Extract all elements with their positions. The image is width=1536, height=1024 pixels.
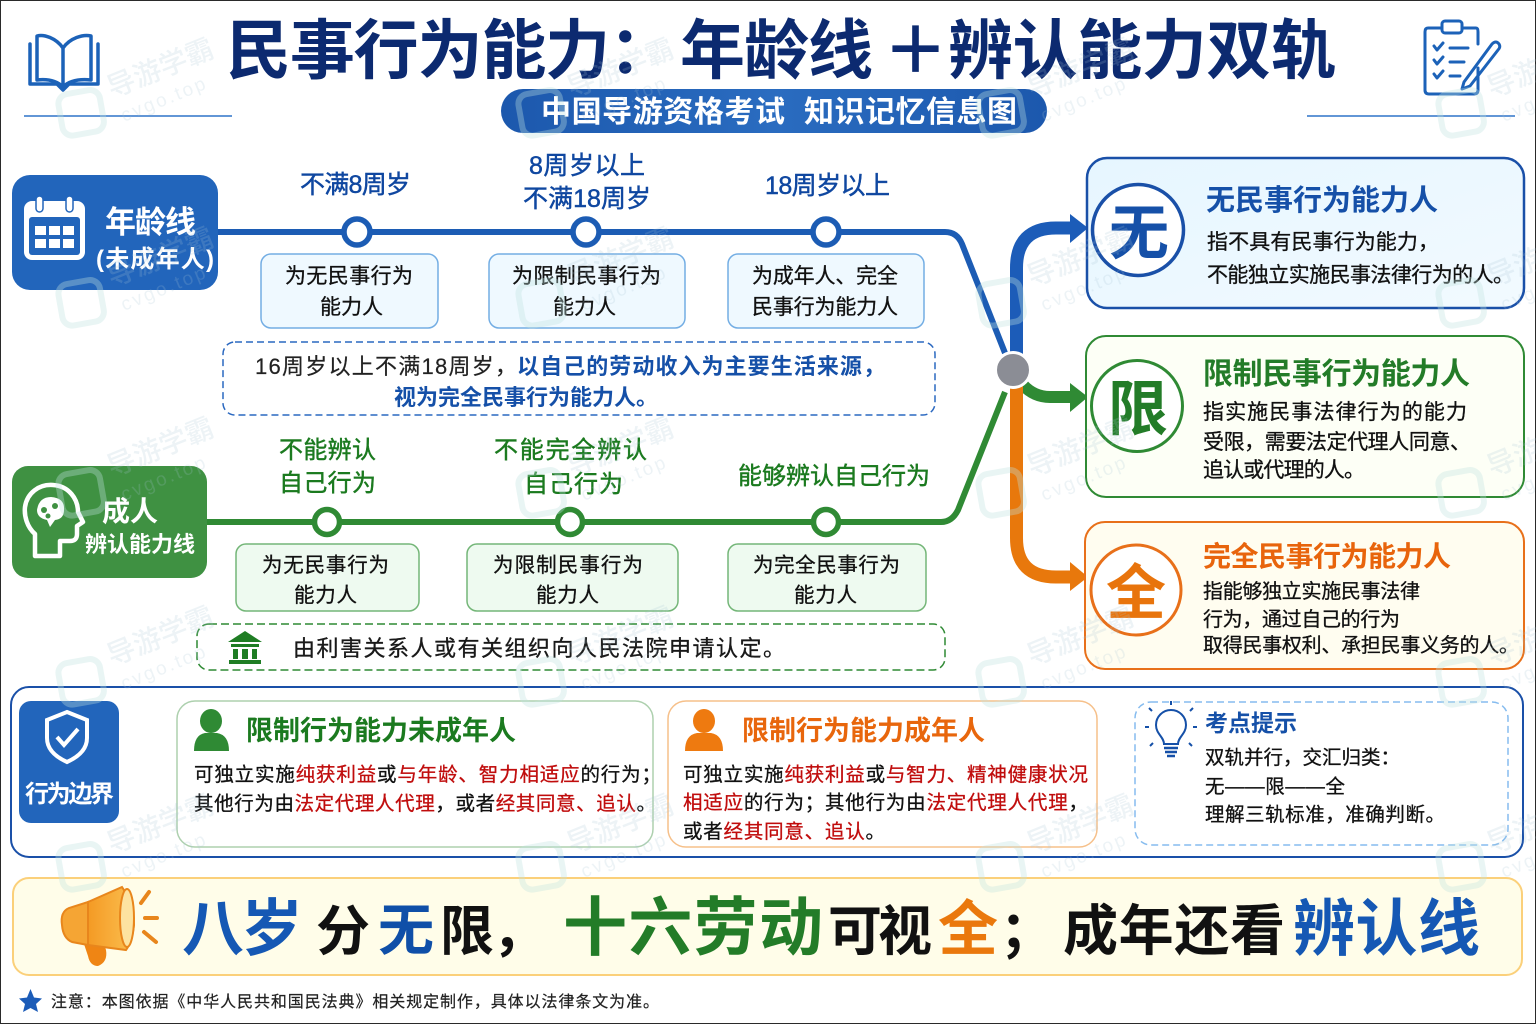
card: 8 to 18 bbox=[489, 254, 685, 328]
text: cvgo.top bbox=[118, 829, 211, 883]
text: 导游学霸 bbox=[103, 33, 218, 104]
text: slogan: 无 bbox=[378, 899, 434, 962]
text: slogan: 成年还看 bbox=[1063, 900, 1285, 962]
text: cvgo.top bbox=[578, 73, 671, 127]
card: limited adult: 或者经其同意、追认。 bbox=[683, 821, 885, 843]
arrow: to limited bbox=[1023, 385, 1072, 397]
text: slogan: ； bbox=[1000, 902, 1054, 962]
box: age line heading bbox=[12, 175, 218, 290]
icon: light bulb bbox=[1145, 701, 1197, 756]
card: partly recognise: 能力人 bbox=[536, 584, 599, 607]
title: 年龄线 bbox=[680, 14, 873, 87]
box: age line heading: (未成年人) bbox=[96, 246, 214, 273]
arrow: to none bbox=[1016, 228, 1072, 356]
text: cvgo.top bbox=[578, 641, 671, 695]
node labels: 不满8周岁 bbox=[300, 171, 411, 199]
card: 8 to 18: 为限制民事行为 bbox=[512, 265, 661, 288]
arrows: hub to categories bbox=[996, 214, 1088, 591]
card: can recognise: 为完全民事行为 bbox=[753, 554, 900, 577]
text: 导游学霸 bbox=[1023, 412, 1138, 483]
text: slogan: ， bbox=[492, 902, 546, 962]
panel: mnemonic slogan bbox=[13, 878, 1522, 975]
box: boundary label: 行为边界 bbox=[25, 781, 114, 808]
panel: cognition line bbox=[12, 392, 1005, 670]
note: court determination: 由利害关系人或有关组织向人民法院申请认定。 bbox=[293, 636, 785, 661]
panel: no capacity: 不能独立实施民事法律行为的人。 bbox=[1207, 264, 1514, 287]
note: age 16 rule: 16周岁以上不满18周岁， bbox=[255, 354, 517, 379]
card: exam tip: 理解三轨标准，准确判断。 bbox=[1205, 804, 1445, 826]
node labels: 自己行为 bbox=[524, 471, 623, 498]
text: slogan: 八岁 bbox=[182, 895, 303, 964]
text: 导游学霸 bbox=[103, 601, 218, 672]
text: 导游学霸 bbox=[1023, 601, 1138, 672]
panel: limited capacity: 追认或代理的人。 bbox=[1203, 459, 1365, 482]
text: 导游学霸 bbox=[1023, 33, 1138, 104]
node labels: 不能完全辨认 bbox=[494, 437, 647, 464]
card: cannot recognise: 为无民事行为 bbox=[262, 554, 389, 577]
icon: calendar bbox=[24, 196, 85, 260]
icon: checklist clipboard bbox=[1425, 21, 1500, 94]
icon: 限 badge: 限 bbox=[1108, 376, 1168, 443]
note: age 16 rule: 以自己的劳动收入为主要生活来源， bbox=[517, 354, 885, 379]
line: green track bbox=[207, 392, 1005, 522]
card: 18 and over bbox=[728, 254, 924, 328]
text: cvgo.top bbox=[1038, 829, 1131, 883]
text: cvgo.top bbox=[578, 262, 671, 316]
card: limited minor: 可独立实施纯获利益或与年龄、智力相适应的行为； bbox=[194, 764, 661, 786]
text: 导游学霸 bbox=[563, 33, 678, 104]
panel: full capacity bbox=[1085, 522, 1524, 669]
panel: full capacity: 行为，通过自己的行为 bbox=[1203, 608, 1400, 631]
card: limited adult: 可独立实施纯获利益或与智力、精神健康状况 bbox=[683, 764, 1088, 786]
node labels: 8周岁以上 bbox=[529, 152, 645, 180]
panel: no capacity: 指不具有民事行为能力， bbox=[1207, 231, 1439, 254]
panel: age line bbox=[12, 152, 1005, 415]
node labels: 18周岁以上 bbox=[765, 172, 890, 200]
text: cvgo.top bbox=[118, 452, 211, 506]
card: can recognise bbox=[728, 544, 926, 611]
line: blue track bbox=[218, 232, 1005, 353]
card: partly recognise: 为限制民事行为 bbox=[493, 554, 643, 577]
panel: limited capacity bbox=[1086, 336, 1524, 497]
card: limited minor bbox=[177, 701, 661, 847]
node labels bbox=[300, 152, 890, 213]
icon: star bbox=[19, 989, 42, 1012]
nodes bbox=[314, 510, 838, 534]
panel: full capacity: 取得民事权利、承担民事义务的人。 bbox=[1203, 634, 1519, 657]
icon: shield bbox=[47, 712, 87, 762]
footnote: 注意：本图依据《中华人民共和国民法典》相关规定制作，具体以法律条文为准。 bbox=[51, 992, 659, 1011]
panel: limited capacity: 受限，需要法定代理人同意、 bbox=[1203, 431, 1471, 454]
note: court determination bbox=[197, 624, 945, 670]
text: cvgo.top bbox=[118, 73, 211, 127]
icon: head with brain bbox=[25, 485, 83, 556]
header bbox=[24, 14, 1515, 133]
subtitle pill: 知识记忆信息图 bbox=[804, 96, 1017, 129]
icon: green person bbox=[194, 709, 229, 751]
text: slogan: 十六劳动 bbox=[563, 892, 823, 964]
title: ＋ bbox=[883, 14, 948, 87]
icon: megaphone bbox=[62, 887, 157, 966]
text: cvgo.top bbox=[578, 452, 671, 506]
icon: 无 badge: 无 bbox=[1109, 200, 1169, 267]
icon: 限 badge bbox=[1092, 360, 1182, 452]
box: age line heading: 年龄线 bbox=[105, 205, 196, 240]
title: 辨认能力双轨 bbox=[948, 14, 1336, 87]
text: 导游学霸 bbox=[103, 789, 218, 860]
panel: limited capacity: 指实施民事法律行为的能力 bbox=[1203, 401, 1467, 424]
text: cvgo.top bbox=[578, 829, 671, 883]
text: slogan: 全 bbox=[938, 896, 998, 963]
card: exam tip: 双轨并行，交汇归类： bbox=[1205, 747, 1400, 769]
card: under 8: 为无民事行为 bbox=[285, 265, 413, 288]
subtitle pill bbox=[501, 89, 1047, 133]
text: 导游学霸 bbox=[563, 601, 678, 672]
text: slogan: 分 bbox=[316, 902, 370, 962]
panel: no capacity: 无民事行为能力人 bbox=[1206, 184, 1438, 217]
panel: full capacity: 完全民事行为能力人 bbox=[1203, 541, 1451, 572]
text: cvgo.top bbox=[1038, 452, 1131, 506]
node labels: 不满18周岁 bbox=[523, 185, 651, 213]
text: 导游学霸 bbox=[1023, 222, 1138, 293]
text: 导游学霸 bbox=[563, 222, 678, 293]
icon: 无 badge bbox=[1092, 184, 1184, 276]
node labels bbox=[279, 437, 930, 498]
card: 18 and over: 为成年人、完全 bbox=[752, 265, 898, 288]
nodes bbox=[344, 219, 839, 245]
text: slogan: 辨认线 bbox=[1293, 895, 1480, 964]
note: age 16 rule: 视为完全民事行为能力人。 bbox=[394, 385, 658, 410]
card: under 8 bbox=[261, 254, 438, 328]
box: adult heading: 辨认能力线 bbox=[85, 532, 195, 557]
card: exam tip: 无——限——全 bbox=[1205, 776, 1345, 798]
title bbox=[226, 14, 1336, 87]
text: 导游学霸 bbox=[1023, 789, 1138, 860]
node labels: 不能辨认 bbox=[279, 437, 376, 464]
text: cvgo.top bbox=[118, 641, 211, 695]
text: slogan bbox=[182, 892, 1480, 964]
card: 18 and over: 民事行为能力人 bbox=[752, 296, 898, 319]
node labels: 能够辨认自己行为 bbox=[738, 463, 930, 490]
card: limited minor: 限制行为能力未成年人 bbox=[246, 716, 516, 746]
card: limited adult: 相适应的行为；其他行为由法定代理人代理， bbox=[683, 792, 1088, 814]
text: cvgo.top bbox=[1038, 73, 1131, 127]
text: slogan: 可视 bbox=[828, 902, 932, 962]
card: limited adult bbox=[668, 701, 1097, 847]
text: 导游学霸 bbox=[563, 789, 678, 860]
card: limited adult: 限制行为能力成年人 bbox=[742, 716, 985, 746]
card: 8 to 18: 能力人 bbox=[553, 296, 616, 319]
node labels: 自己行为 bbox=[279, 470, 376, 497]
card: limited minor: 其他行为由法定代理人代理，或者经其同意、追认。 bbox=[194, 793, 656, 815]
text: slogan: 限 bbox=[440, 902, 494, 962]
panel: no capacity bbox=[1087, 158, 1524, 308]
icon: 全 badge: 全 bbox=[1106, 560, 1166, 627]
subtitle pill: 中国导游资格考试 bbox=[541, 96, 785, 129]
panel: full capacity: 指能够独立实施民事法律 bbox=[1203, 580, 1420, 603]
box: boundary label bbox=[19, 701, 119, 823]
icon: open book bbox=[30, 36, 98, 90]
hub bbox=[996, 352, 1030, 388]
arrow: to full bbox=[1016, 386, 1072, 577]
icon: courthouse bbox=[228, 631, 262, 664]
panel: limited capacity: 限制民事行为能力人 bbox=[1203, 358, 1470, 391]
box: adult heading bbox=[12, 466, 207, 578]
text: cvgo.top bbox=[118, 262, 211, 316]
note: age 16 rule bbox=[223, 342, 935, 415]
icon: orange person bbox=[685, 709, 723, 751]
card: can recognise: 能力人 bbox=[794, 584, 857, 607]
text: cvgo.top bbox=[1038, 641, 1131, 695]
text: 导游学霸 bbox=[103, 222, 218, 293]
card: cannot recognise bbox=[236, 544, 419, 611]
box: adult heading: 成人 bbox=[102, 496, 158, 527]
card: cannot recognise: 能力人 bbox=[294, 584, 357, 607]
text: cvgo.top bbox=[1038, 262, 1131, 316]
card: under 8: 能力人 bbox=[320, 296, 383, 319]
card: exam tip bbox=[1135, 701, 1508, 845]
card: exam tip: 考点提示 bbox=[1205, 710, 1297, 736]
icon: 全 badge bbox=[1091, 545, 1181, 635]
text: 导游学霸 bbox=[563, 412, 678, 483]
panel: behaviour boundary bbox=[11, 687, 1523, 857]
card: partly recognise bbox=[467, 544, 678, 611]
text: 导游学霸 bbox=[103, 412, 218, 483]
title: 民事行为能力： bbox=[226, 14, 674, 87]
